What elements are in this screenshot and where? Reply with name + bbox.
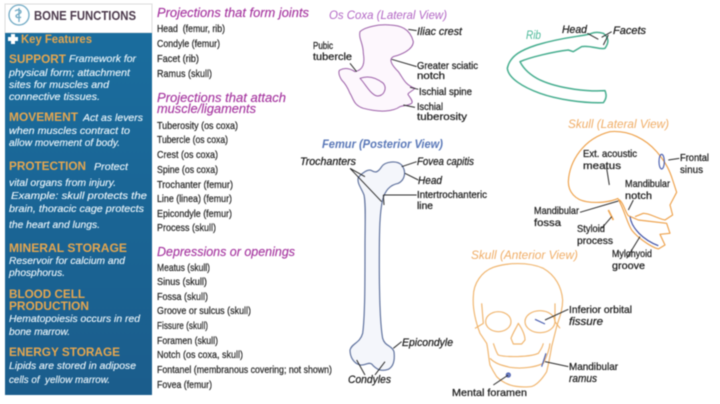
list: projections that form joints: Ramus (skull): [157, 68, 212, 80]
os coxa labels: tubercle: [313, 51, 352, 63]
list: projections that attach muscle/ligaments: Trochanter (femur): [157, 179, 233, 191]
diagram: os coxa: Os Coxa (Lateral View): [329, 8, 447, 22]
mineral storage: [8, 241, 127, 279]
movement: Act as levers: [82, 112, 144, 124]
support: physical form; attachment: [8, 67, 131, 79]
os coxa labels: Ischial: [417, 101, 443, 113]
skull lateral outline: [568, 131, 679, 258]
skull lateral labels: sinus: [680, 164, 703, 176]
list: depressions or openings: Depressions or openings: [157, 244, 295, 259]
skull lateral labels: Mandibular: [534, 205, 579, 217]
blood cell production: [9, 287, 141, 338]
list: depressions or openings: Fissure (skull): [157, 320, 208, 332]
skull anterior labels: Inferior orbital: [569, 304, 632, 316]
list: depressions or openings: Meatus (skull): [157, 262, 210, 274]
list: depressions or openings: Fossa (skull): [157, 291, 208, 303]
femur labels: line: [417, 200, 433, 212]
icon: caduceus badge: [9, 5, 29, 25]
os coxa labels: notch: [417, 70, 445, 82]
rib labels: Facets: [613, 25, 646, 37]
list: depressions or openings: Notch (os coxa, skull): [157, 349, 243, 361]
skull anterior labels: Mental foramen: [452, 387, 527, 399]
list: projections that form joints: Head (femur, rib): [157, 23, 225, 35]
list: depressions or openings: [157, 244, 332, 391]
list: projections that attach muscle/ligaments: muscle/ligaments: [157, 101, 256, 116]
os coxa labels: Pubic: [313, 40, 333, 52]
skull anterior labels: Mandibular: [569, 361, 618, 373]
list: projections that attach muscle/ligaments: Epicondyle (femur): [157, 208, 232, 220]
rib labels: Head: [562, 24, 588, 36]
list: projections that attach muscle/ligaments: Spine (os coxa): [157, 164, 218, 176]
skull lateral labels: Frontal: [680, 152, 709, 164]
movement: when muscles contract to: [9, 125, 130, 137]
femur labels: Fovea capitis: [417, 156, 474, 168]
list: depressions or openings: Sinus (skull): [157, 276, 207, 288]
femur labels: [300, 156, 487, 386]
diagram: rib: Rib: [526, 28, 541, 42]
list: depressions or openings: Foramen (skull): [157, 335, 218, 347]
os coxa labels: Iliac crest: [417, 26, 463, 38]
support: connective tissues.: [9, 91, 100, 103]
femur labels: Intertrochanteric: [417, 189, 487, 201]
list: projections that attach muscle/ligaments: Tuberosity (os coxa): [157, 120, 238, 132]
list: projections that form joints: Projections that form joints: [157, 5, 309, 20]
support: sites for muscles and: [9, 79, 110, 91]
skull lateral labels: groove: [612, 260, 645, 272]
list: projections that form joints: Facet (rib): [157, 53, 199, 65]
list: projections that attach muscle/ligaments: Projections that attach: [157, 90, 286, 105]
sidebar header: [5, 4, 152, 33]
skull lateral labels: Ext. acoustic: [583, 148, 637, 160]
os coxa labels: Greater sciatic: [417, 60, 478, 72]
diagram: femur: [300, 137, 487, 386]
protection: Protect: [94, 161, 129, 173]
support: [8, 52, 136, 103]
support: Framework for: [69, 53, 136, 65]
diagram: femur: Femur (Posterior View): [322, 137, 443, 151]
os coxa labels: Ischial spine: [419, 86, 472, 98]
protection: [9, 159, 147, 231]
skull lateral labels: Styloid: [577, 223, 605, 235]
femur labels: Trochanters: [300, 156, 356, 168]
energy storage: Lipids are stored in adipose: [9, 360, 136, 372]
mineral storage: Reservoir for calcium and: [9, 255, 126, 267]
blood cell production: BLOOD CELL: [9, 287, 85, 301]
list: projections that attach muscle/ligaments: Crest (os coxa): [157, 149, 218, 161]
femur labels: Epicondyle: [402, 337, 453, 349]
skull anterior outline: [473, 264, 568, 387]
skull lateral labels: Mandibular: [625, 178, 670, 190]
list: projections that attach muscle/ligaments: [157, 90, 286, 234]
key features heading: Key Features: [21, 32, 92, 46]
femur labels: Head: [418, 175, 443, 187]
list: projections that form joints: Condyle (femur): [157, 38, 220, 50]
skull lateral labels: [534, 148, 709, 272]
protection: PROTECTION: [9, 159, 86, 173]
mineral storage: phosphorus.: [8, 267, 65, 279]
skull lateral labels: fossa: [534, 217, 561, 229]
panel: key features sidebar: [5, 4, 152, 395]
list: depressions or openings: Fovea (femur): [157, 379, 212, 391]
diagram: skull anterior view: Skull (Anterior View): [471, 248, 578, 262]
femur labels: Condyles: [348, 374, 391, 386]
icon: plus: [8, 34, 18, 44]
list: depressions or openings: Groove or sulcus (skull): [157, 305, 251, 317]
blood cell production: bone marrow.: [9, 326, 70, 338]
energy storage: ENERGY STORAGE: [9, 345, 120, 359]
diagram: os coxa: [313, 8, 478, 123]
sidebar title: BONE FUNCTIONS: [34, 8, 136, 23]
movement: [9, 110, 144, 149]
skull lateral labels: process: [577, 235, 613, 247]
rib labels: [562, 24, 646, 37]
diagram: skull anterior view: [452, 248, 632, 399]
energy storage: [9, 345, 136, 386]
movement: MOVEMENT: [9, 110, 79, 124]
protection: brain, thoracic cage protects: [9, 203, 145, 215]
mineral storage: MINERAL STORAGE: [9, 241, 127, 255]
diagram: skull lateral view: Skull (Lateral View): [568, 117, 669, 131]
list: projections that attach muscle/ligaments: Line (linea) (femur): [157, 193, 232, 205]
energy storage: cells of yellow marrow.: [9, 374, 110, 386]
skull lateral labels: notch: [625, 190, 652, 202]
list: depressions or openings: Fontanel (membranous covering; not shown): [157, 364, 332, 376]
diagram: rib: [507, 24, 646, 103]
os coxa labels: [313, 26, 478, 123]
os coxa labels: tuberosity: [417, 111, 468, 123]
os coxa bone outline: [339, 25, 418, 111]
blood cell production: Hematopoiesis occurs in red: [9, 313, 141, 325]
list: projections that form joints: [157, 5, 309, 80]
sidebar background: [5, 33, 152, 395]
movement: allow movement of body.: [9, 137, 120, 149]
list: projections that attach muscle/ligaments: Tubercle (os coxa): [157, 134, 228, 146]
skull lateral labels: meatus: [583, 160, 621, 172]
skull anterior labels: ramus: [569, 373, 597, 385]
list: projections that attach muscle/ligaments: Process (skull): [157, 222, 216, 234]
protection: vital organs from injury.: [9, 177, 116, 189]
protection: the heart and lungs.: [9, 219, 100, 231]
femur outline: [350, 162, 418, 375]
skull lateral labels: Mylohyoid: [612, 248, 652, 260]
diagram: skull lateral view: [534, 117, 709, 272]
skull anterior labels: fissure: [569, 316, 603, 328]
skull anterior labels: [452, 304, 632, 399]
protection: Example: skull protects the: [11, 190, 147, 202]
blood cell production: PRODUCTION: [9, 299, 89, 313]
support: SUPPORT: [9, 52, 67, 66]
rib outline: [507, 32, 612, 103]
